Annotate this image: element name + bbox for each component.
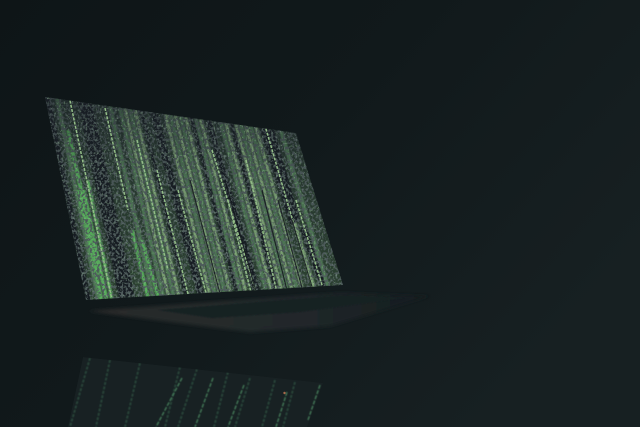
reflection bright streaks (156, 378, 320, 427)
screen backlight (45, 97, 343, 300)
speckle light (46, 98, 341, 300)
photo scene (45, 97, 390, 427)
speckle dark (40, 90, 350, 305)
laptop screen (40, 90, 350, 305)
dark bands (45, 97, 326, 300)
thin dark gaps (190, 180, 312, 292)
reflection tint (76, 358, 106, 398)
laptop base (88, 293, 430, 332)
keyboard (158, 295, 405, 318)
reflection orange speck (283, 392, 286, 394)
code streaks: bright lower-left green (68, 130, 158, 299)
base deck (88, 293, 430, 332)
code streaks: bright pale (70, 101, 322, 298)
code streaks: mid (125, 108, 314, 295)
screen reflection (68, 357, 323, 427)
code streaks: dim (57, 98, 328, 299)
top dimming (45, 97, 308, 244)
reflection streaks (70, 358, 295, 427)
